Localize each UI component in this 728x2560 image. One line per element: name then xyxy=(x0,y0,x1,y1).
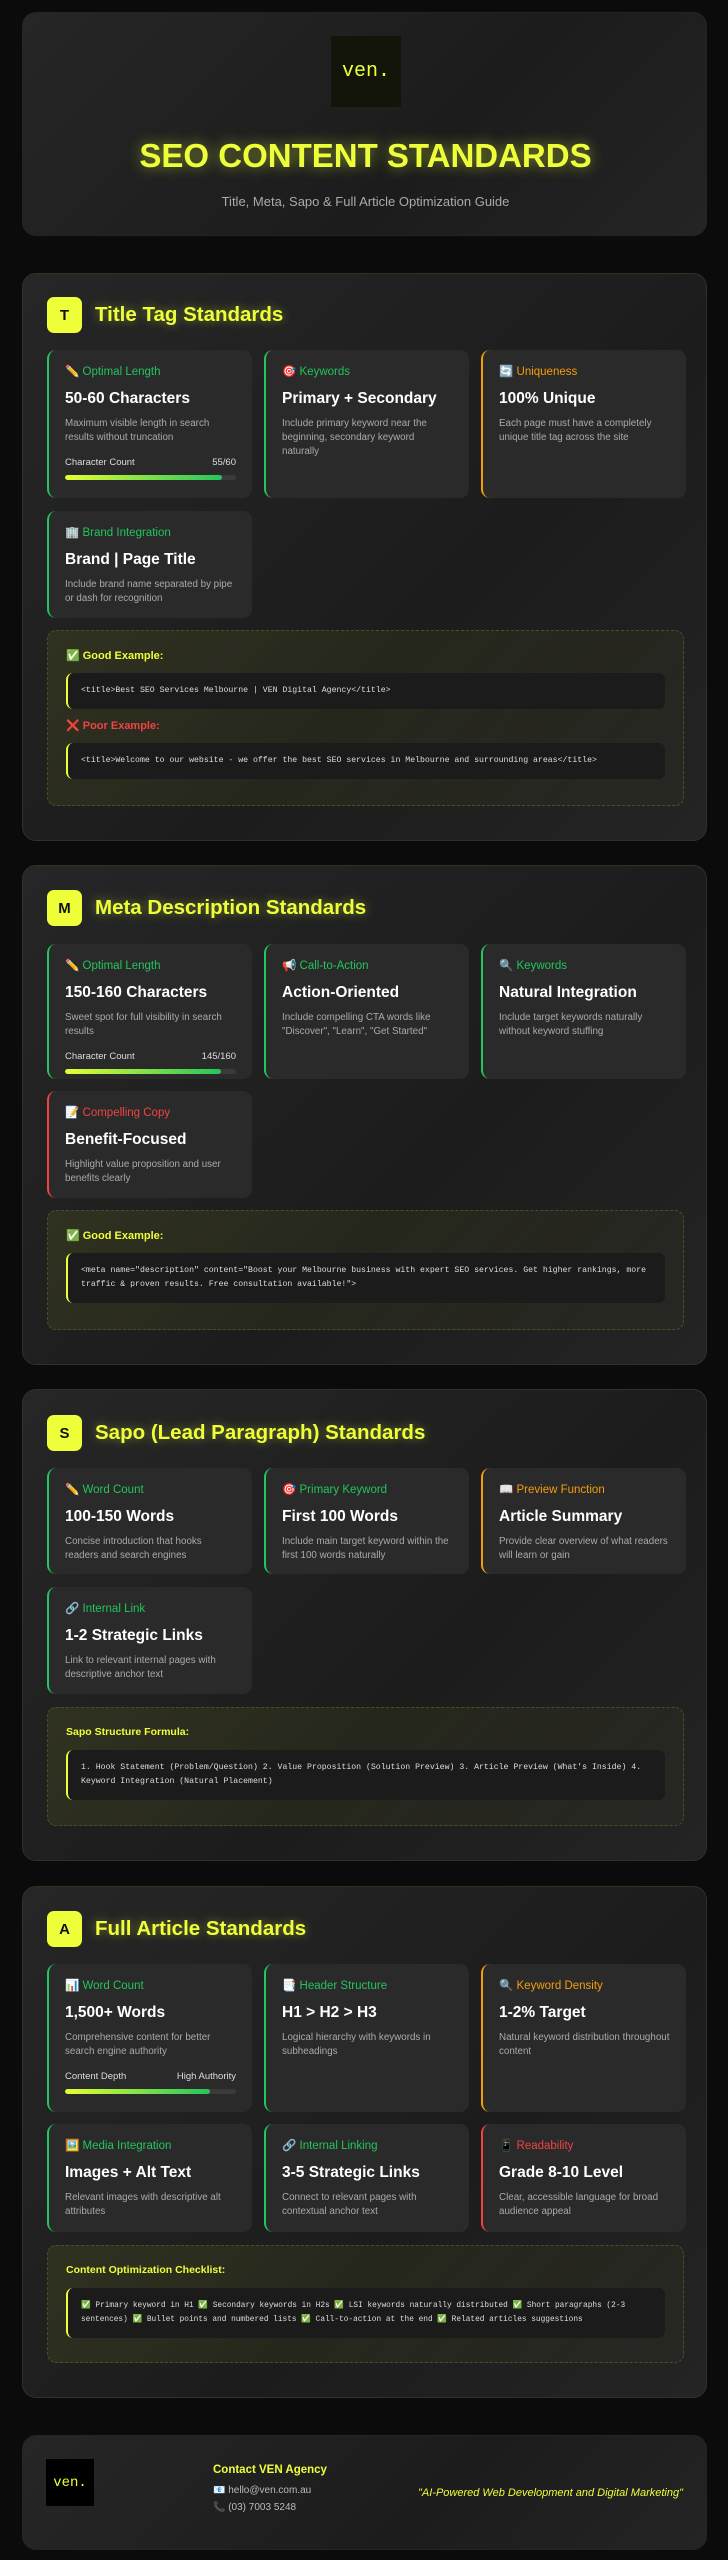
card: readability: Clear, accessible language for broad audience appeal xyxy=(499,2192,658,2217)
card: uniqueness: 100% Unique xyxy=(499,390,595,407)
footer logo xyxy=(46,2459,94,2506)
heading: Title Tag Standards xyxy=(95,303,283,326)
panel: full article standards xyxy=(22,1886,707,2398)
subtitle: Title, Meta, Sapo & Full Article Optimization Guide xyxy=(222,194,509,209)
tagline: "AI-Powered Web Development and Digital Marketing" xyxy=(418,2487,683,2499)
card: media integration: 🖼️ Media Integration xyxy=(65,2140,171,2152)
card: keyword density xyxy=(481,1964,686,2112)
card: keyword density: Natural keyword distribution throughout content xyxy=(499,2032,669,2057)
card: uniqueness: 🔄 Uniqueness xyxy=(499,366,577,378)
card: keywords: Natural Integration xyxy=(499,984,637,1001)
example box: ✅ Good Example: xyxy=(66,1230,163,1242)
card: word count: Content Depth xyxy=(65,2071,126,2082)
card: brand integration: 🏢 Brand Integration xyxy=(65,527,171,539)
card: keyword density: 1-2% Target xyxy=(499,2004,586,2021)
card: optimal length: 145/160 xyxy=(202,1051,236,1062)
card: word count: Concise introduction that hooks readers and search engines xyxy=(65,1536,202,1561)
card: internal link: 🔗 Internal Link xyxy=(65,1603,145,1615)
card: media integration xyxy=(47,2124,252,2232)
checklist box xyxy=(47,2245,684,2363)
card: preview function: 📖 Preview Function xyxy=(499,1484,605,1496)
logo xyxy=(331,36,401,107)
heading: M xyxy=(58,900,71,916)
card: call to action xyxy=(264,944,469,1079)
card: optimal length: Maximum visible length in search results without truncation xyxy=(65,418,209,443)
card: brand integration: Include brand name separated by pipe or dash for recognition xyxy=(65,579,232,604)
examples box xyxy=(47,630,684,806)
panel: title tag standards xyxy=(22,273,707,841)
card: optimal length: Sweet spot for full visibility in search results xyxy=(65,1012,222,1037)
heading: S xyxy=(59,1424,70,1442)
card: readability: 📱 Readability xyxy=(499,2140,573,2152)
card: header structure: Logical hierarchy with keywords in subheadings xyxy=(282,2032,431,2057)
heading: Sapo (Lead Paragraph) Standards xyxy=(95,1421,425,1444)
card: compelling copy: 📝 Compelling Copy xyxy=(65,1107,170,1119)
card: optimal length xyxy=(47,350,252,498)
example box: <meta name="description" content="Boost your Melbourne business with expert SEO services. Get higher rankings, more traffic & proven results. Free consultation available!"> xyxy=(81,1266,646,1289)
formula box: Sapo Structure Formula: xyxy=(66,1726,189,1738)
card: word count: ✏️ Word Count xyxy=(65,1484,144,1496)
card: optimal length: 150-160 Characters xyxy=(65,984,207,1001)
card: compelling copy: Benefit-Focused xyxy=(65,1131,186,1148)
card: brand integration xyxy=(47,511,252,618)
card: word count: 100-150 Words xyxy=(65,1508,174,1525)
card: word count xyxy=(47,1468,252,1574)
checklist box: Content Optimization Checklist: xyxy=(66,2264,225,2276)
card: brand integration: Brand | Page Title xyxy=(65,551,196,568)
card: readability: Grade 8-10 Level xyxy=(499,2164,623,2181)
header panel xyxy=(22,12,707,236)
card: compelling copy: Highlight value proposition and user benefits clearly xyxy=(65,1159,221,1184)
contact info: 📧 hello@ven.com.au xyxy=(213,2485,311,2496)
heading xyxy=(47,297,286,333)
card: word count: 1,500+ Words xyxy=(65,2004,165,2021)
examples box: <title>Welcome to our website - we offer the best SEO services in Melbourne and surrounding areas</title> xyxy=(81,756,597,765)
card: optimal length: Character Count xyxy=(65,1051,135,1062)
checklist box: ✅ Primary keyword in H1 ✅ Secondary keywords in H2s ✅ LSI keywords naturally distributed ✅ Short paragraphs (2-3 sentences) ✅ Bullet points and numbered lists ✅ Call-to-action at the end ✅ Related articles suggestions xyxy=(81,2302,625,2324)
card: header structure: H1 > H2 > H3 xyxy=(282,2004,377,2021)
card: optimal length: Character Count xyxy=(65,457,135,468)
heading: T xyxy=(60,306,69,324)
card: keywords: 🔍 Keywords xyxy=(499,960,567,972)
card: preview function: Provide clear overview of what readers will learn or gain xyxy=(499,1536,668,1561)
card: optimal length: ✏️ Optimal Length xyxy=(65,366,161,378)
card: word count: Comprehensive content for better search engine authority xyxy=(65,2032,210,2057)
card: readability xyxy=(481,2124,686,2232)
card: preview function xyxy=(481,1468,686,1574)
heading: Full Article Standards xyxy=(95,1917,306,1940)
card: internal link: 1-2 Strategic Links xyxy=(65,1627,203,1644)
heading xyxy=(47,1415,428,1451)
card: media integration: Images + Alt Text xyxy=(65,2164,191,2181)
card: internal linking: Connect to relevant pages with contextual anchor text xyxy=(282,2192,417,2217)
card: internal linking: 3-5 Strategic Links xyxy=(282,2164,420,2181)
contact info: Contact VEN Agency xyxy=(213,2464,327,2476)
logo: ven. xyxy=(342,60,390,83)
card: keyword density: 🔍 Keyword Density xyxy=(499,1980,603,1992)
examples box: ✅ Good Example: xyxy=(66,650,163,662)
card: uniqueness: Each page must have a completely unique title tag across the site xyxy=(499,418,651,443)
formula box xyxy=(47,1707,684,1826)
card: primary keyword: First 100 Words xyxy=(282,1508,398,1525)
contact info: 📞 (03) 7003 5248 xyxy=(213,2502,296,2513)
card: optimal length: 55/60 xyxy=(212,457,236,468)
title: SEO CONTENT STANDARDS xyxy=(139,137,592,174)
card: internal linking xyxy=(264,2124,469,2232)
card: optimal length: 50-60 Characters xyxy=(65,390,190,407)
card: uniqueness xyxy=(481,350,686,498)
panel: meta description standards xyxy=(22,865,707,1365)
card: call to action: 📢 Call-to-Action xyxy=(282,960,369,972)
card: keywords: Include primary keyword near the beginning, secondary keyword naturally xyxy=(282,418,427,457)
formula box: 1. Hook Statement (Problem/Question) 2. Value Proposition (Solution Preview) 3. Article Preview (What's Inside) 4. Keyword Integration (Natural Placement) xyxy=(81,1763,641,1786)
card: header structure: 📑 Header Structure xyxy=(282,1980,387,1992)
panel: sapo standards xyxy=(22,1389,707,1861)
contact info xyxy=(213,2464,327,2513)
card: internal linking: 🔗 Internal Linking xyxy=(282,2140,378,2152)
card: compelling copy xyxy=(47,1091,252,1198)
card: word count: High Authority xyxy=(177,2071,236,2082)
card: optimal length: ✏️ Optimal Length xyxy=(65,960,161,972)
card: keywords: Primary + Secondary xyxy=(282,390,437,407)
card: primary keyword: 🎯 Primary Keyword xyxy=(282,1484,387,1496)
card: internal link xyxy=(47,1587,252,1694)
card: media integration: Relevant images with descriptive alt attributes xyxy=(65,2192,221,2217)
card: primary keyword: Include main target keyword within the first 100 words naturally xyxy=(282,1536,449,1561)
examples box: <title>Best SEO Services Melbourne | VEN Digital Agency</title> xyxy=(81,686,391,695)
card: keywords: Include target keywords naturally without keyword stuffing xyxy=(499,1012,642,1037)
card: keywords xyxy=(264,350,469,498)
example box xyxy=(47,1210,684,1330)
card: call to action: Action-Oriented xyxy=(282,984,399,1001)
card: primary keyword xyxy=(264,1468,469,1574)
heading xyxy=(47,1911,309,1947)
card: header structure xyxy=(264,1964,469,2112)
card: call to action: Include compelling CTA words like "Discover", "Learn", "Get Started" xyxy=(282,1012,430,1037)
card: optimal length xyxy=(47,944,252,1079)
card: internal link: Link to relevant internal pages with descriptive anchor text xyxy=(65,1655,216,1680)
card: word count xyxy=(47,1964,252,2112)
heading: Meta Description Standards xyxy=(95,896,366,919)
heading: A xyxy=(59,1920,70,1938)
card: word count: 📊 Word Count xyxy=(65,1980,144,1992)
heading xyxy=(47,890,369,926)
card: preview function: Article Summary xyxy=(499,1508,622,1525)
card: keywords: 🎯 Keywords xyxy=(282,366,350,378)
card: keywords xyxy=(481,944,686,1079)
footer logo: ven. xyxy=(53,2474,87,2490)
examples box: ❌ Poor Example: xyxy=(66,720,160,732)
footer xyxy=(22,2435,707,2550)
